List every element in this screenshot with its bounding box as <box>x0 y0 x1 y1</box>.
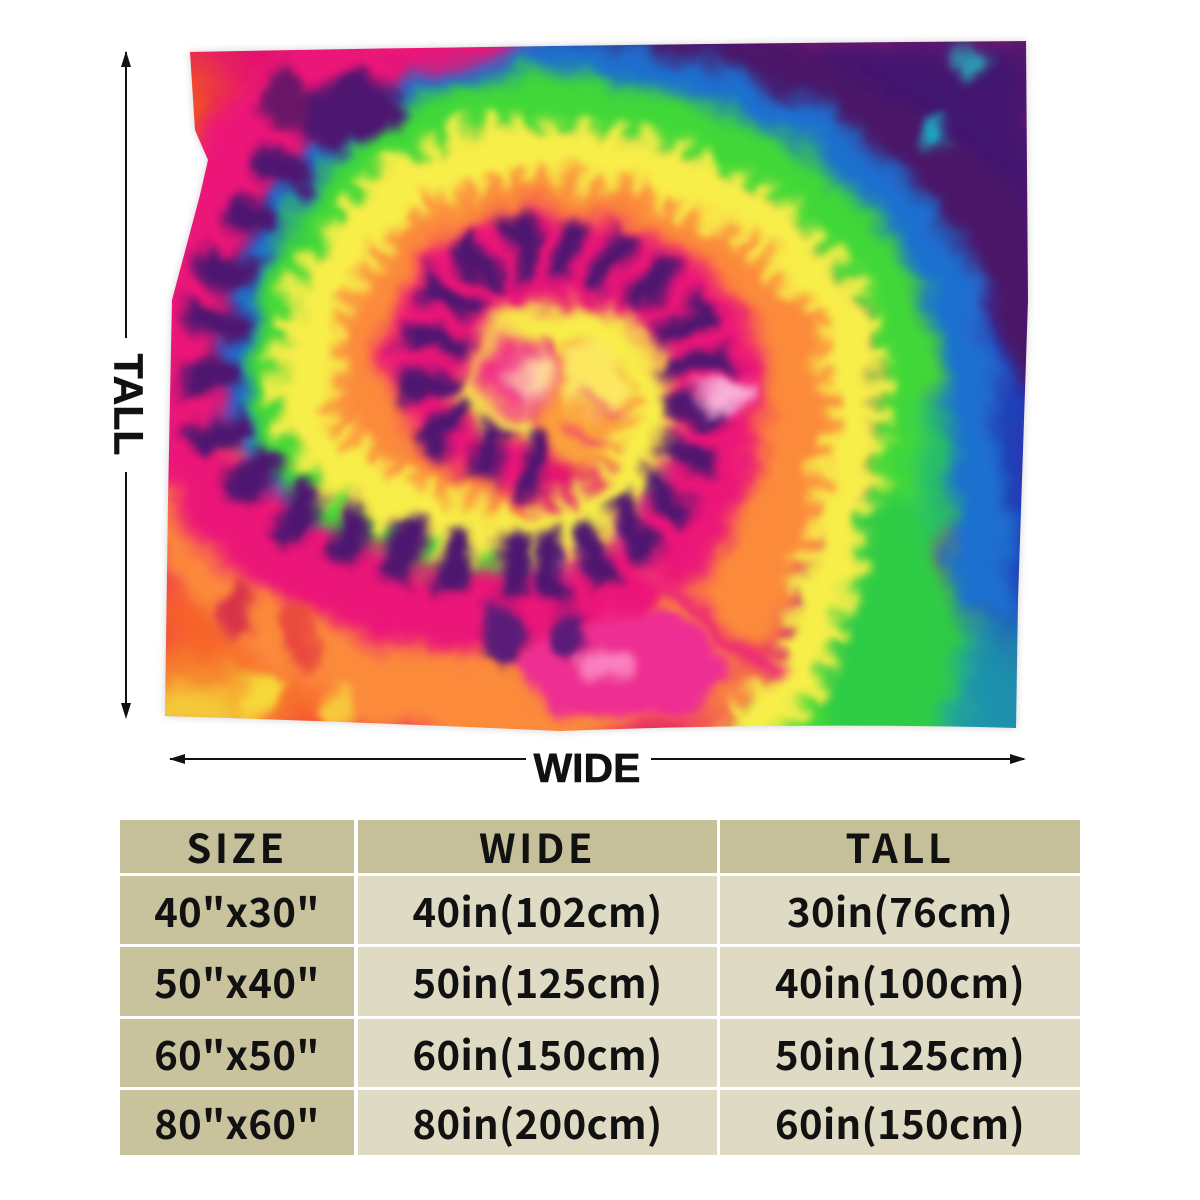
row: 40x30: 40"x30" <box>154 880 320 938</box>
row: 60x50: 60in(150cm) <box>412 1024 663 1082</box>
row: 40x30: 40in(102cm) <box>412 880 663 938</box>
row: 40x30 <box>120 876 1080 944</box>
size table <box>120 817 1080 1155</box>
header row: WIDE <box>479 817 596 875</box>
outer purple arm <box>210 50 1050 385</box>
background colour zones <box>165 41 1028 728</box>
pink rays <box>170 10 720 615</box>
row: 80x60: 80"x60" <box>154 1093 320 1151</box>
green arm <box>285 110 957 865</box>
row: 60x50: 50in(125cm) <box>775 1024 1025 1082</box>
row: 40x30: 30in(76cm) <box>787 880 1013 938</box>
label: WIDE: WIDE <box>533 745 641 791</box>
row: 60x50: 60"x50" <box>154 1024 320 1082</box>
row: 80x60: 60in(150cm) <box>775 1093 1025 1151</box>
orange arm <box>175 200 795 695</box>
yellow arm <box>305 150 855 875</box>
row: 80x60 <box>120 1090 1080 1155</box>
header row: SIZE <box>186 817 288 875</box>
highlights and teal spots <box>217 46 988 728</box>
row: 60x50 <box>120 1019 1080 1087</box>
label: TALL: TALL <box>106 354 152 455</box>
row: 50x40 <box>120 947 1080 1016</box>
header row <box>120 817 1080 875</box>
header row: TALL <box>845 817 955 875</box>
row: 50x40: 50"x40" <box>154 952 320 1010</box>
blue arm <box>250 70 985 620</box>
blanket: tie-dye spiral <box>162 38 1032 734</box>
row: 50x40: 40in(100cm) <box>775 952 1025 1010</box>
purple rays <box>210 67 700 565</box>
arrow: width <box>169 754 1026 764</box>
arrow: height <box>121 51 131 719</box>
row: 50x40: 50in(125cm) <box>412 952 663 1010</box>
row: 80x60: 80in(200cm) <box>412 1093 663 1151</box>
centre burst <box>482 338 562 410</box>
